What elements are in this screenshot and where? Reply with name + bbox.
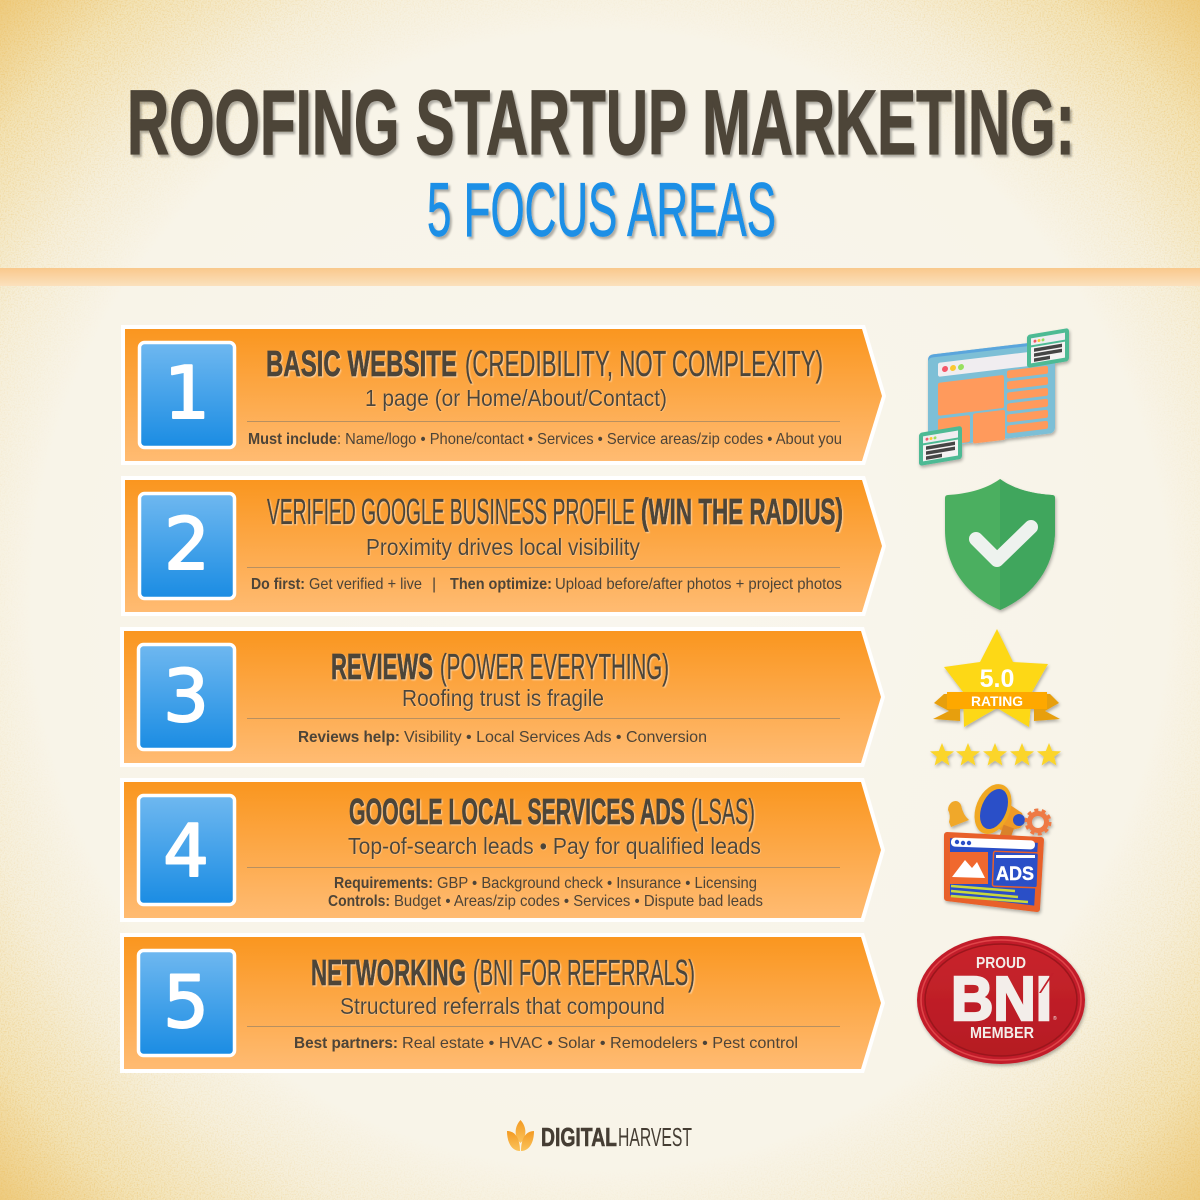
icon: 5.0 rating badge: 5.0 <box>980 665 1014 693</box>
number badge 3: 3 <box>163 654 209 738</box>
details 5: Best partners: <box>294 1035 398 1052</box>
details 2: | <box>432 576 436 593</box>
number badge 4 <box>138 796 234 904</box>
panel: step 4 local services ads <box>120 778 885 922</box>
number badge 2 <box>140 494 234 598</box>
heading 2: (WIN THE RADIUS) <box>641 491 843 532</box>
number badge 1: 1 <box>164 351 210 435</box>
details 4 <box>328 875 763 910</box>
heading 2: VERIFIED GOOGLE BUSINESS PROFILE <box>267 491 635 532</box>
heading 3: (POWER EVERYTHING) <box>440 646 669 687</box>
icon: ads megaphone and browser <box>947 779 1050 909</box>
panel: step 3 reviews <box>120 627 885 767</box>
number badge 4: 4 <box>163 809 209 893</box>
panel: step 5 networking <box>120 933 885 1073</box>
logo: Digital Harvest: DIGITAL <box>541 1122 617 1152</box>
details 1: : Name/logo • Phone/contact • Services • Service areas/zip codes • About you <box>337 431 842 448</box>
details 2: Do first: <box>251 576 305 593</box>
details 2: Upload before/after photos + project photos <box>555 576 842 593</box>
heading 1: (CREDIBILITY, NOT COMPLEXITY) <box>465 343 823 384</box>
number badge 5 <box>138 950 234 1056</box>
icon: 5.0 rating badge <box>930 629 1061 766</box>
heading 4: GOOGLE LOCAL SERVICES ADS <box>349 791 685 832</box>
panel: step 1 basic website <box>121 325 886 465</box>
details 4: Budget • Areas/zip codes • Services • Dispute bad leads <box>394 893 763 910</box>
subheading 1: 1 page (or Home/About/Contact) <box>365 385 667 411</box>
details 4: GBP • Background check • Insurance • Licensing <box>437 875 757 892</box>
heading 4: (LSAS) <box>691 791 755 832</box>
icon: ads megaphone and browser: ADS <box>996 864 1034 885</box>
number badge 5: 5 <box>163 960 209 1044</box>
panel: step 2 google business profile <box>121 476 886 616</box>
details 2: Get verified + live <box>309 576 422 593</box>
details 5: Real estate • HVAC • Solar • Remodelers • Pest control <box>402 1035 798 1052</box>
subheading 2: Proximity drives local visibility <box>366 534 640 560</box>
icon: verified shield <box>945 479 1055 610</box>
icon: proud BNI member badge: ® <box>1053 1015 1057 1022</box>
heading 1 <box>266 343 823 384</box>
number badge 3 <box>138 644 234 750</box>
heading 5: (BNI FOR REFERRALS) <box>473 952 695 993</box>
icon: wheat leaves <box>507 1120 534 1151</box>
subheading 5: Structured referrals that compound <box>340 993 665 1019</box>
details 2: Then optimize: <box>450 576 552 593</box>
heading 5: NETWORKING <box>311 952 466 993</box>
subheading 4: Top-of-search leads • Pay for qualified leads <box>348 833 761 859</box>
heading 5 <box>311 952 695 993</box>
five small stars <box>930 743 1061 766</box>
icon: proud BNI member badge: BNI <box>951 965 1052 1034</box>
icon: website layout <box>919 328 1069 466</box>
details 3: Reviews help: <box>298 729 400 746</box>
heading 3: REVIEWS <box>331 646 433 687</box>
number badge 2: 2 <box>164 502 210 586</box>
header divider band <box>0 268 1200 286</box>
icon: proud BNI member badge: MEMBER <box>970 1025 1034 1042</box>
details 4: Controls: <box>328 893 390 910</box>
subheading 3: Roofing trust is fragile <box>402 685 604 711</box>
details 1: Must include <box>248 431 337 448</box>
heading 3 <box>331 646 669 687</box>
icon: proud BNI member badge <box>917 936 1085 1064</box>
details 2 <box>251 576 842 593</box>
heading 1: BASIC WEBSITE <box>266 343 457 384</box>
icon: proud BNI member badge: PROUD <box>976 955 1026 972</box>
details 4: Requirements: <box>334 875 433 892</box>
details 3: Visibility • Local Services Ads • Conversion <box>404 729 707 746</box>
subtitle: 5 FOCUS AREAS <box>427 168 776 253</box>
logo: Digital Harvest: HARVEST <box>618 1122 692 1152</box>
number badge 1 <box>140 342 234 448</box>
logo: Digital Harvest <box>507 1120 692 1152</box>
icon: 5.0 rating badge: RATING <box>971 693 1023 709</box>
